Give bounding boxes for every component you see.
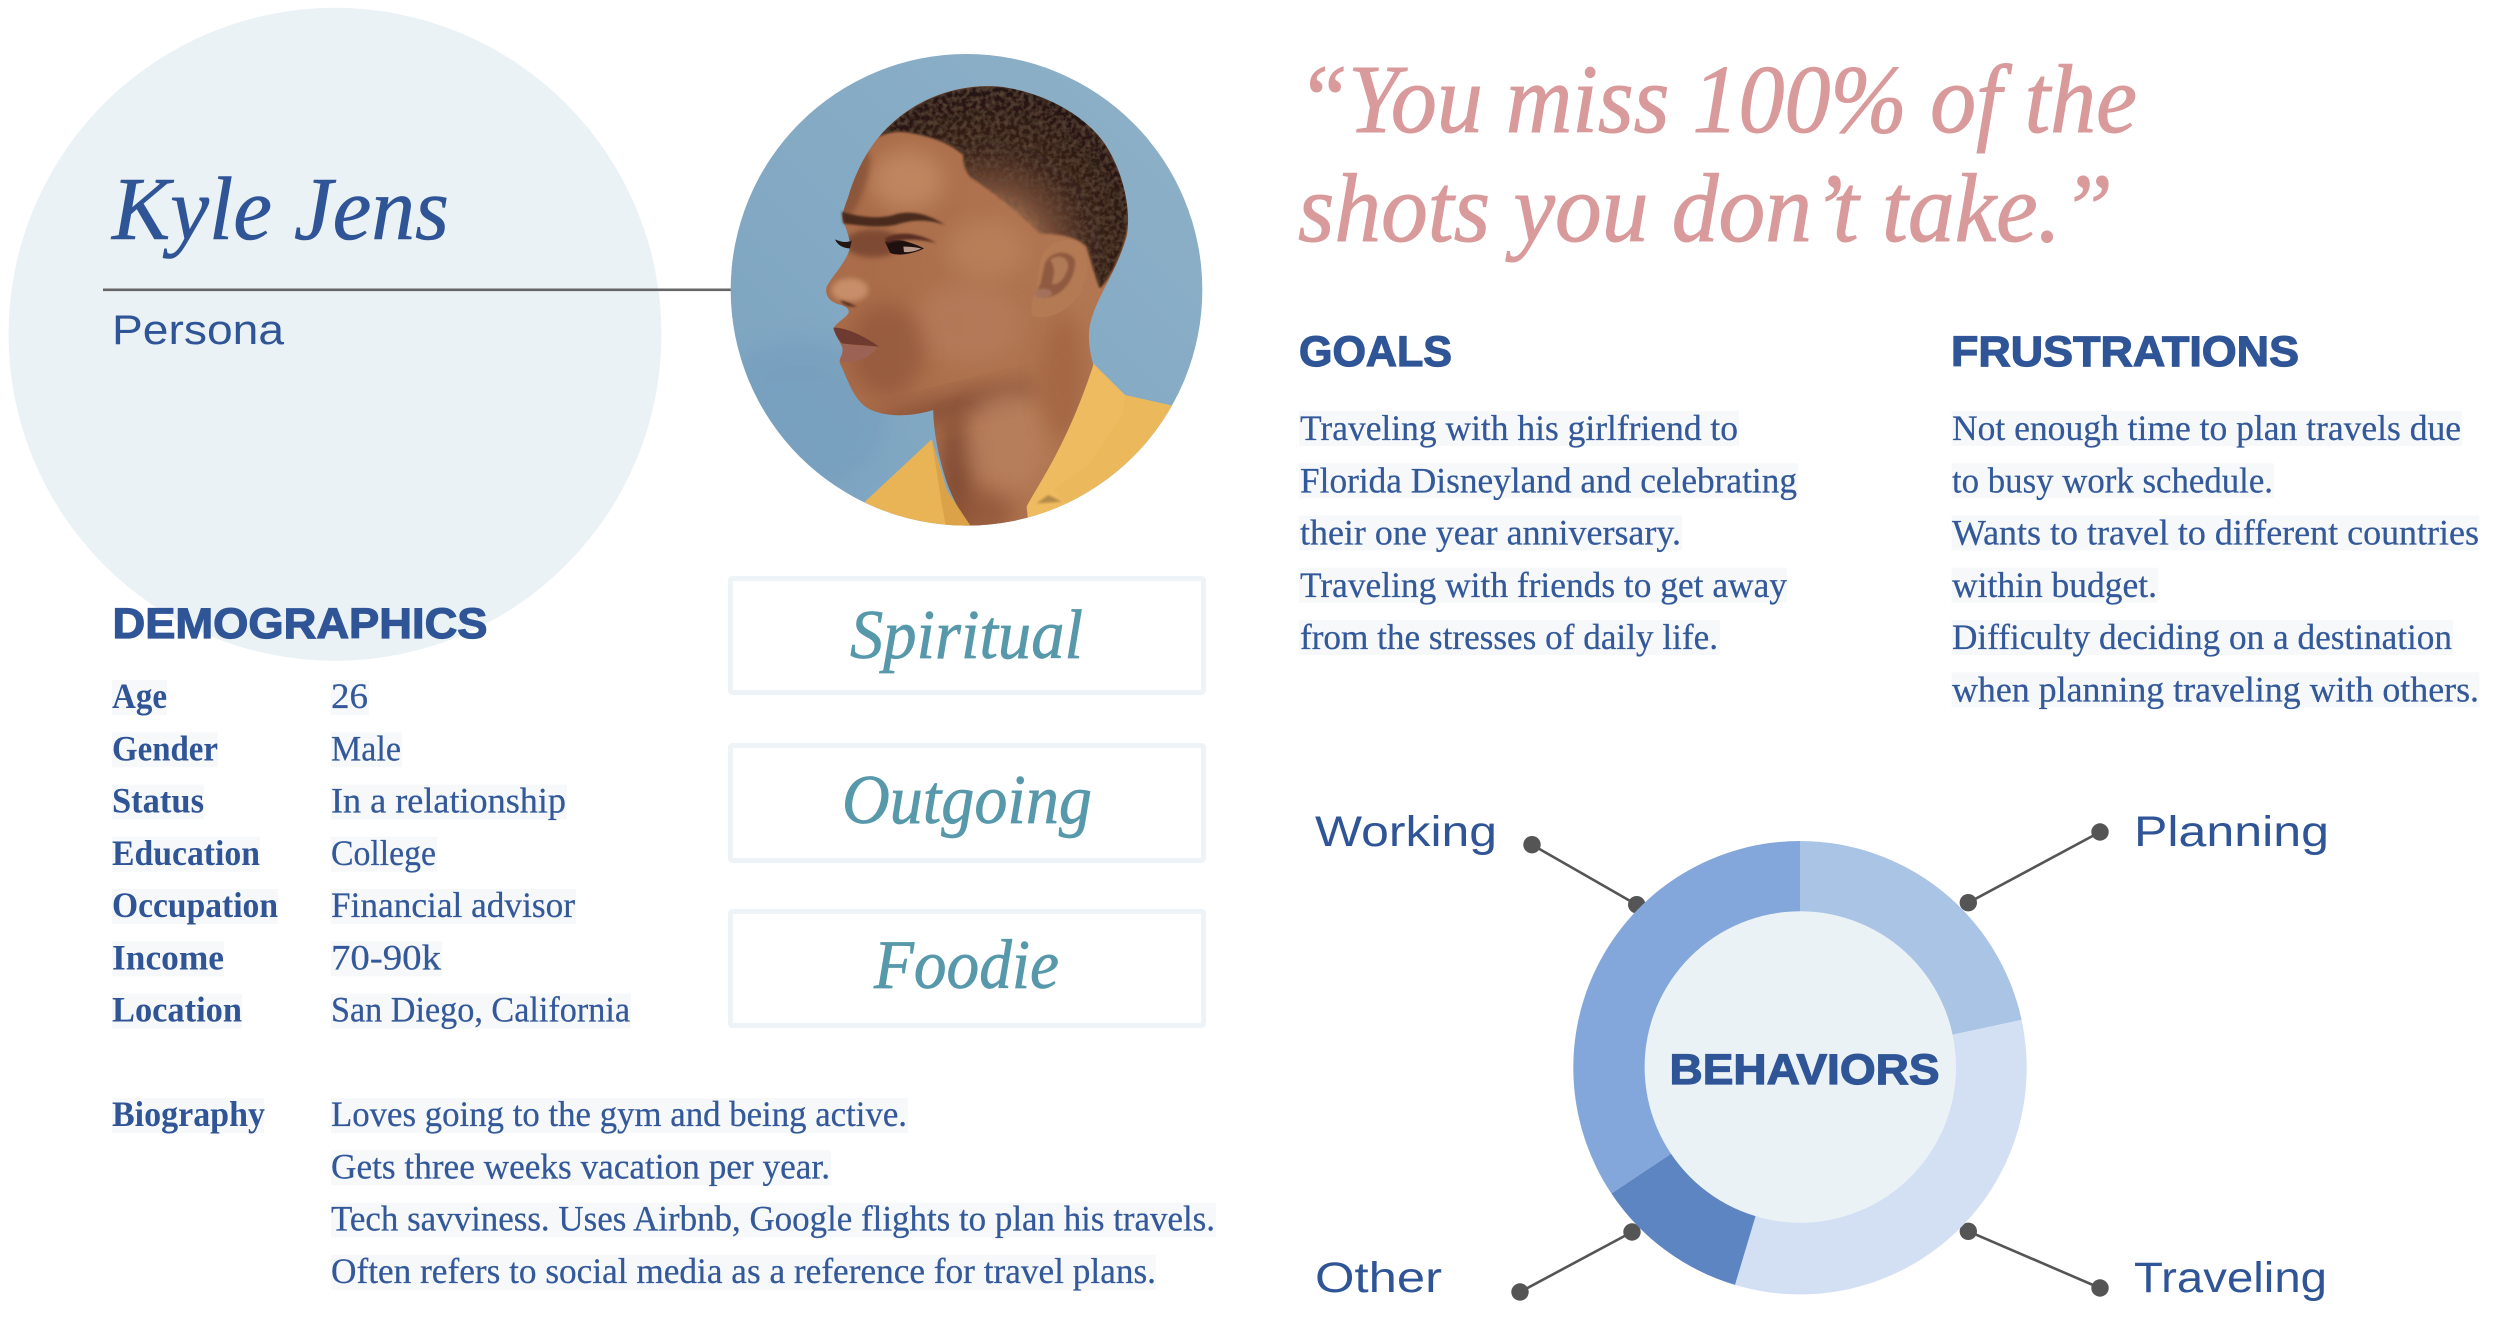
biography xyxy=(112,1094,1216,1291)
tag: Outgoing: Outgoing xyxy=(842,762,1092,839)
quote: “You miss 100% of the xyxy=(1297,46,2137,154)
row: education xyxy=(112,833,437,873)
row: age: Age xyxy=(112,676,167,716)
row: status: In a relationship xyxy=(331,780,566,820)
quote xyxy=(1297,46,2137,263)
frustrations text xyxy=(1952,408,2480,709)
row: location: Location xyxy=(112,990,242,1030)
frustrations text: Difficulty deciding on a destination xyxy=(1952,617,2452,657)
frustrations text: to busy work schedule. xyxy=(1952,460,2273,500)
biography: Gets three weeks vacation per year. xyxy=(331,1146,830,1186)
demographics heading: DEMOGRAPHICS xyxy=(112,600,488,648)
quote: shots you don’t take.” xyxy=(1298,155,2113,263)
row: education: Education xyxy=(112,833,260,873)
portrait photo illustration xyxy=(730,54,1202,526)
row: status xyxy=(112,780,567,820)
tag: Spiritual xyxy=(730,578,1204,692)
demographics table xyxy=(112,676,631,1030)
tag: Foodie xyxy=(730,912,1204,1026)
donut center xyxy=(1645,911,1956,1223)
goals text xyxy=(1299,408,1798,657)
segment: traveling xyxy=(1735,1020,2027,1294)
goals heading: GOALS xyxy=(1299,328,1452,376)
goals text: from the stresses of daily life. xyxy=(1300,617,1718,657)
tag: Spiritual: Spiritual xyxy=(850,597,1083,674)
row: education: College xyxy=(331,833,436,873)
segment: other xyxy=(1611,1068,1800,1285)
label: traveling: Traveling xyxy=(2134,1254,2327,1302)
row: status: Status xyxy=(112,780,204,820)
biography: Tech savviness. Uses Airbnb, Google flights to plan his travels. xyxy=(331,1198,1215,1238)
biography: Biography xyxy=(112,1094,265,1134)
segment: planning xyxy=(1800,841,2022,1068)
row: income: 70-90k xyxy=(331,937,441,977)
behaviors title: BEHAVIORS xyxy=(1670,1046,1940,1094)
frustrations text: when planning traveling with others. xyxy=(1952,669,2479,709)
goals text: Florida Disneyland and celebrating xyxy=(1300,460,1797,500)
tag: Outgoing xyxy=(730,746,1204,860)
goals text: Traveling with friends to get away xyxy=(1300,565,1787,605)
row: income: Income xyxy=(112,937,224,977)
segment: working xyxy=(1573,841,1800,1194)
row: gender xyxy=(112,728,402,768)
row: gender: Male xyxy=(331,728,401,768)
behaviors donut chart xyxy=(1573,841,2027,1294)
row: gender: Gender xyxy=(112,728,218,768)
background circle xyxy=(8,8,662,661)
row: age xyxy=(112,676,369,716)
goals text: Traveling with his girlfriend to xyxy=(1300,408,1738,448)
biography: Often refers to social media as a reference for travel plans. xyxy=(331,1251,1156,1291)
persona subtitle: Persona xyxy=(112,306,285,353)
goals text: their one year anniversary. xyxy=(1300,512,1681,552)
row: location: San Diego, California xyxy=(331,990,630,1030)
frustrations heading: FRUSTRATIONS xyxy=(1951,328,2299,376)
biography: Loves going to the gym and being active. xyxy=(331,1094,907,1134)
tag: Foodie: Foodie xyxy=(873,927,1059,1004)
name: Kyle Jens: Kyle Jens xyxy=(110,160,449,259)
row: location xyxy=(112,990,631,1030)
name rule line xyxy=(103,288,733,291)
row: occupation xyxy=(112,885,576,925)
row: occupation: Financial advisor xyxy=(331,885,575,925)
label: planning: Planning xyxy=(2134,808,2329,856)
label: other: Other xyxy=(1315,1254,1442,1302)
row: age: 26 xyxy=(331,676,368,716)
frustrations text: within budget. xyxy=(1952,565,2157,605)
row: income xyxy=(112,937,442,977)
row: occupation: Occupation xyxy=(112,885,278,925)
frustrations text: Wants to travel to different countries xyxy=(1952,512,2479,552)
label: working: Working xyxy=(1315,808,1497,856)
frustrations text: Not enough time to plan travels due xyxy=(1952,408,2461,448)
behaviors connectors xyxy=(1511,823,2109,1301)
